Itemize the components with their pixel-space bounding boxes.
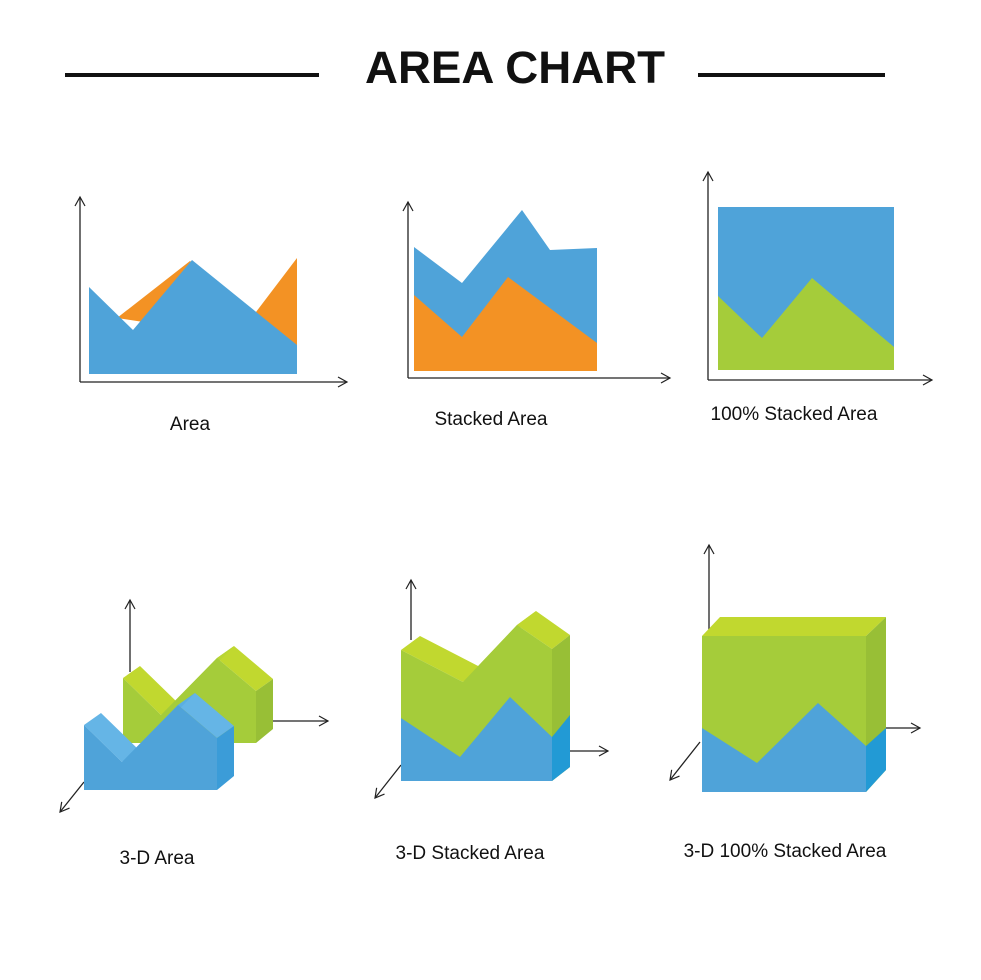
label: area: Area — [170, 414, 210, 435]
chart: 100% stacked area — [708, 172, 932, 380]
chart: 3-D 100% stacked area — [670, 545, 920, 792]
title: AREA CHART — [365, 42, 665, 93]
chart: stacked area — [408, 202, 670, 378]
chart: 3-D stacked area — [375, 580, 608, 798]
chart: 3-D area — [60, 600, 328, 812]
label: stacked area: Stacked Area — [434, 409, 548, 430]
label: 3-D 100% stacked area: 3-D 100% Stacked Area — [684, 841, 887, 862]
chart: area — [80, 197, 347, 382]
label: 100% stacked area: 100% Stacked Area — [711, 404, 878, 425]
label: 3-D area: 3-D Area — [120, 848, 195, 869]
label: 3-D stacked area: 3-D Stacked Area — [396, 843, 545, 864]
